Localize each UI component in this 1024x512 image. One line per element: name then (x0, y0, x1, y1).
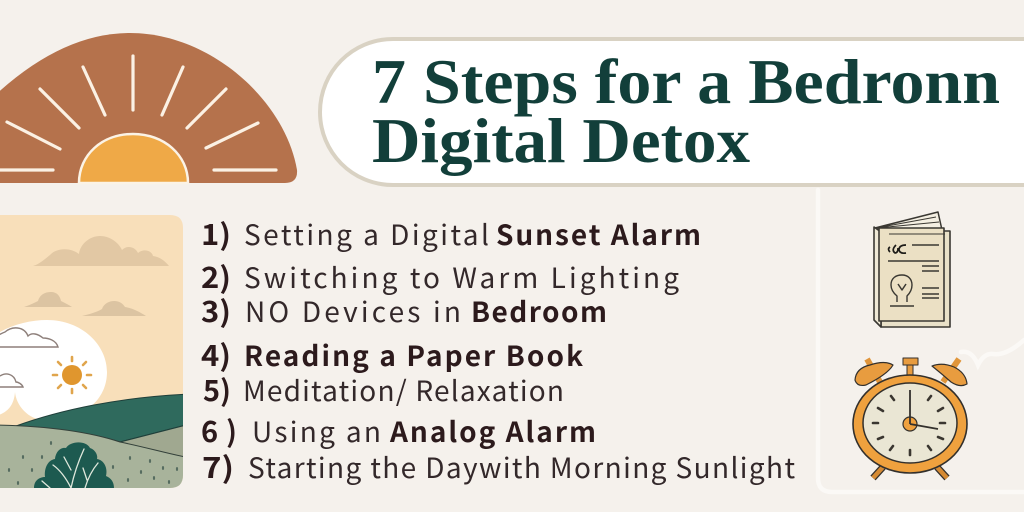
step 6: 6) (201, 409, 237, 451)
clock left bell (855, 362, 893, 385)
step 5: 5) (203, 368, 231, 410)
icon: alarm clock (853, 358, 967, 478)
step 1: Setting a Digital (244, 214, 489, 254)
white sun glow (0, 320, 107, 420)
step 3: 3) (201, 289, 231, 331)
step 2: 2) (201, 255, 231, 297)
bush (34, 442, 114, 488)
clock hands (903, 417, 917, 431)
sun disc (79, 134, 188, 183)
clock body (853, 375, 967, 473)
steps list (201, 212, 795, 487)
panel: white outline frame (818, 190, 1024, 492)
clock top knob (907, 365, 913, 375)
step 1: 1) (201, 212, 231, 254)
clock ticks (873, 396, 945, 455)
grey-green far hill (120, 425, 183, 456)
outlined cloud lower (0, 374, 23, 387)
large cloud (33, 236, 169, 266)
dark green hill (16, 394, 190, 442)
step 4: Reading a Paper Book (244, 335, 583, 375)
clock legs (873, 467, 883, 478)
title line 1: 7 Steps for a Bedronn (372, 47, 1000, 117)
step 7: 7) (202, 445, 234, 487)
light green foreground hill (0, 425, 190, 490)
icon: book (874, 212, 950, 327)
icon: half sun badge (0, 33, 297, 183)
step 7: Starting the Daywith Morning Sunlight (248, 447, 795, 487)
title line 2: Digital Detox (372, 106, 751, 176)
small cloud right (82, 301, 146, 316)
step 2: Switching to Warm Lighting (244, 257, 679, 297)
meadow dots (8, 441, 178, 485)
panel: landscape illustration (0, 215, 190, 490)
outlined cloud top (0, 328, 58, 347)
sun rays (0, 56, 276, 170)
step 3: Bedroom (471, 291, 607, 331)
step 1: Sunset Alarm (496, 214, 701, 254)
clock face (863, 383, 957, 463)
small cloud left (24, 292, 72, 307)
step 6: Using an (252, 411, 381, 451)
step 4: 4) (201, 333, 231, 375)
step 5: Meditation/ Relaxation (243, 370, 564, 410)
title banner (320, 39, 1024, 185)
step 6: Analog Alarm (389, 411, 596, 451)
clock bell stems (867, 359, 880, 382)
clock right bell (932, 364, 967, 386)
small sun icon (53, 357, 91, 393)
step 3: NO Devices in (245, 291, 461, 331)
